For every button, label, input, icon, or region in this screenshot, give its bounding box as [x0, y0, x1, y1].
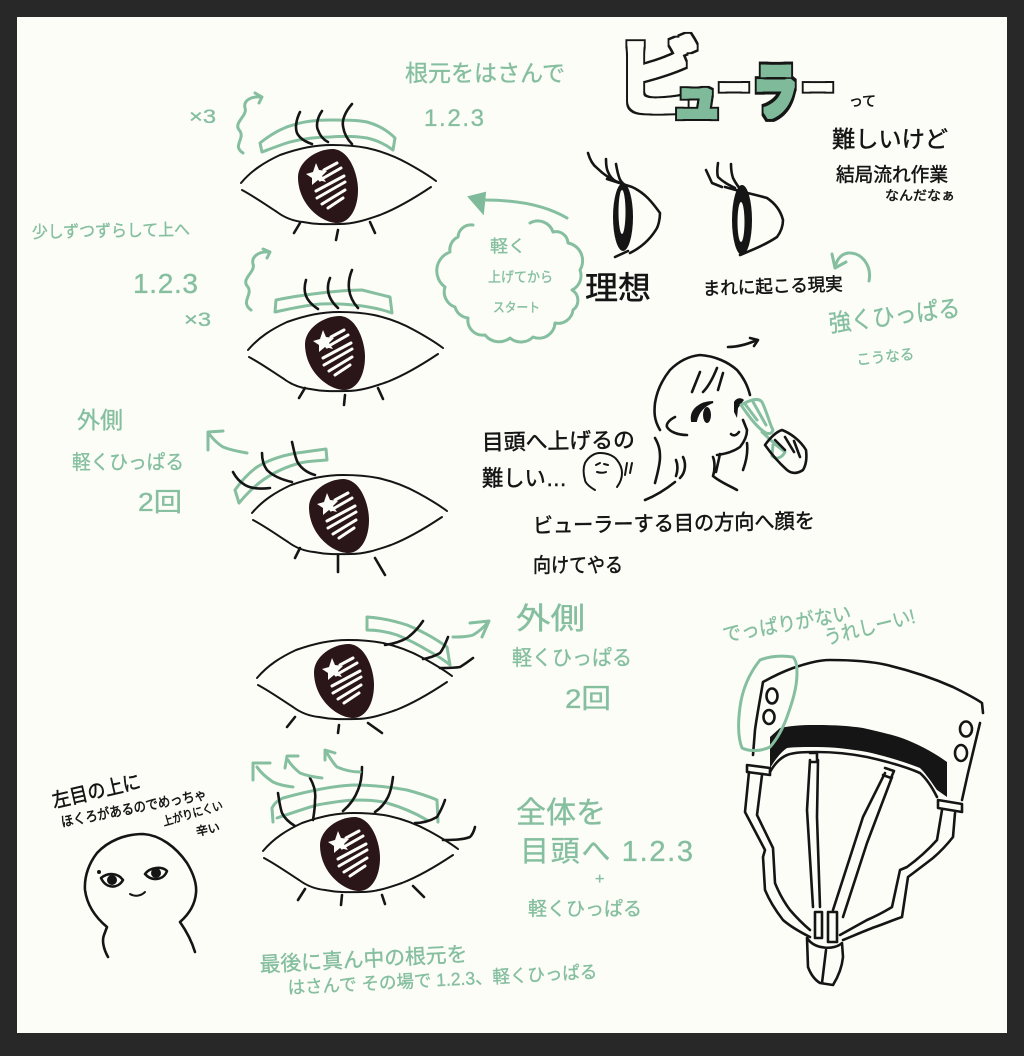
subtitle text: なんだなぁ: [885, 188, 955, 203]
curler band 4: [367, 617, 450, 665]
mole: [97, 870, 101, 874]
arms: [745, 772, 955, 940]
holes: [764, 688, 972, 761]
title: ビューラー: ビ: [616, 32, 700, 126]
title: ビューラー: ラ: [753, 61, 797, 127]
text ビューラーする: ビューラーする目の方向へ顔を: [533, 510, 815, 538]
curler band 2: [275, 290, 392, 313]
motion arrow: [728, 338, 758, 347]
subtitle text: 難しいけど: [832, 126, 948, 152]
curler band 5: [272, 785, 438, 822]
title: ビューラー: ー: [803, 73, 833, 106]
side eye ideal: [588, 153, 660, 257]
text 目頭へ: 目頭へ上げるの: [482, 427, 635, 455]
step 2 eye with curler: [32, 220, 443, 405]
step 1 eye with curler: [189, 60, 565, 240]
cloud text: 軽く: [490, 237, 526, 256]
cloud outline: [437, 221, 583, 342]
clips: [747, 765, 962, 812]
hand: [765, 430, 806, 473]
eye 4: [257, 640, 452, 719]
lashes 2: [299, 270, 383, 405]
title: ビューラー: ュ: [672, 71, 722, 127]
note はさんで: はさんで その場で 1.2.3、軽くひっぱる: [287, 962, 598, 998]
text 難しい: 難しい…: [482, 466, 567, 491]
label 理想: 理想: [585, 270, 651, 306]
step 3 eye outer left: [72, 407, 447, 575]
curler band 1: [260, 120, 395, 152]
label x3: ×3: [184, 310, 211, 331]
arrow 3: [208, 431, 247, 453]
lashes 3: [233, 442, 385, 575]
cloud note: [437, 193, 583, 342]
text 向けてやる: 向けてやる: [533, 554, 623, 577]
label 強くひっぱる: 強くひっぱる: [827, 295, 962, 338]
lashes 1: [294, 104, 375, 240]
note text: 辛い: [195, 820, 221, 839]
curler in hand: [741, 399, 785, 458]
label 1.2.3: 1.2.3: [424, 105, 484, 132]
label 全体を: 全体を: [516, 797, 606, 830]
label 2回: 2回: [565, 684, 611, 714]
step 5 eye whole: [253, 750, 693, 998]
arrow big: [469, 193, 485, 213]
label plus: +: [595, 871, 604, 888]
cloud text: スタート: [493, 300, 540, 315]
subtitle text: って: [849, 93, 876, 109]
subtitle text: [832, 93, 955, 203]
eyes: [101, 868, 167, 887]
label x3: ×3: [189, 107, 216, 128]
pupil: [703, 407, 711, 423]
center bars: [807, 753, 894, 917]
girl eyes: [692, 402, 713, 421]
mouth: [130, 892, 145, 896]
note text: 左目の上に: [50, 770, 143, 813]
curler illustration: [721, 602, 983, 985]
side eye reality: [706, 163, 783, 255]
label 軽くひっぱる: 軽くひっぱる: [512, 647, 632, 670]
label 軽くひっぱる: 軽くひっぱる: [528, 898, 642, 920]
eye 2: [248, 312, 443, 391]
arrow curve: [832, 253, 870, 281]
other eye: [734, 398, 744, 418]
title: ビューラー: ー: [719, 73, 749, 106]
note text: 上がりにくい: [161, 797, 224, 829]
cloud text: 上げてから: [488, 269, 553, 285]
label 少しずつ: 少しずつずらして上へ: [32, 220, 190, 242]
text でっぱりがない: でっぱりがない: [721, 602, 853, 647]
lashes 5: [278, 767, 475, 905]
cloud text: [488, 237, 553, 315]
eye 3: [252, 475, 447, 554]
green loop: [739, 656, 797, 751]
handle: [807, 938, 843, 985]
wavy arrow 2: [246, 249, 270, 310]
side eyes comparison: [585, 153, 962, 369]
note 最後に: 最後に真ん中の根元を: [259, 943, 468, 977]
wavy arrow 1: [238, 93, 262, 153]
curler body: [753, 660, 983, 800]
lashes 4: [287, 621, 473, 733]
label こうなる: こうなる: [856, 346, 915, 369]
step 4 eye outer right: [257, 603, 632, 733]
label まれに起こる現実: まれに起こる現実: [702, 274, 843, 299]
label 目頭へ 1.2.3: 目頭へ 1.2.3: [520, 836, 693, 868]
curler band 3: [235, 449, 327, 503]
base: [815, 912, 837, 942]
mole character: [50, 770, 224, 957]
rubber band: [770, 725, 947, 797]
eye 5: [263, 813, 458, 892]
subtitle text: 結局流れ作業: [836, 164, 948, 186]
frame rim: [770, 752, 937, 797]
label 軽くひっぱる: 軽くひっぱる: [72, 451, 184, 474]
head and hair: [645, 355, 750, 500]
label 2回: 2回: [138, 487, 182, 517]
arrow 4: [453, 621, 489, 637]
girl using curler: [482, 338, 815, 577]
small face: [584, 453, 632, 490]
arrows 5: [253, 750, 360, 787]
eye 1: [241, 145, 436, 224]
note text: [50, 770, 224, 839]
label 外側: 外側: [77, 407, 123, 433]
head: [85, 834, 196, 957]
note text: ほくろがあるのでめっちゃ: [60, 786, 208, 830]
label 根元をはさんで: 根元をはさんで: [405, 60, 565, 86]
title: ビューラー: [616, 32, 833, 127]
label 外側: 外側: [516, 603, 585, 636]
label 1.2.3: 1.2.3: [133, 268, 198, 299]
text うれしーい: うれしーい!: [822, 606, 917, 650]
